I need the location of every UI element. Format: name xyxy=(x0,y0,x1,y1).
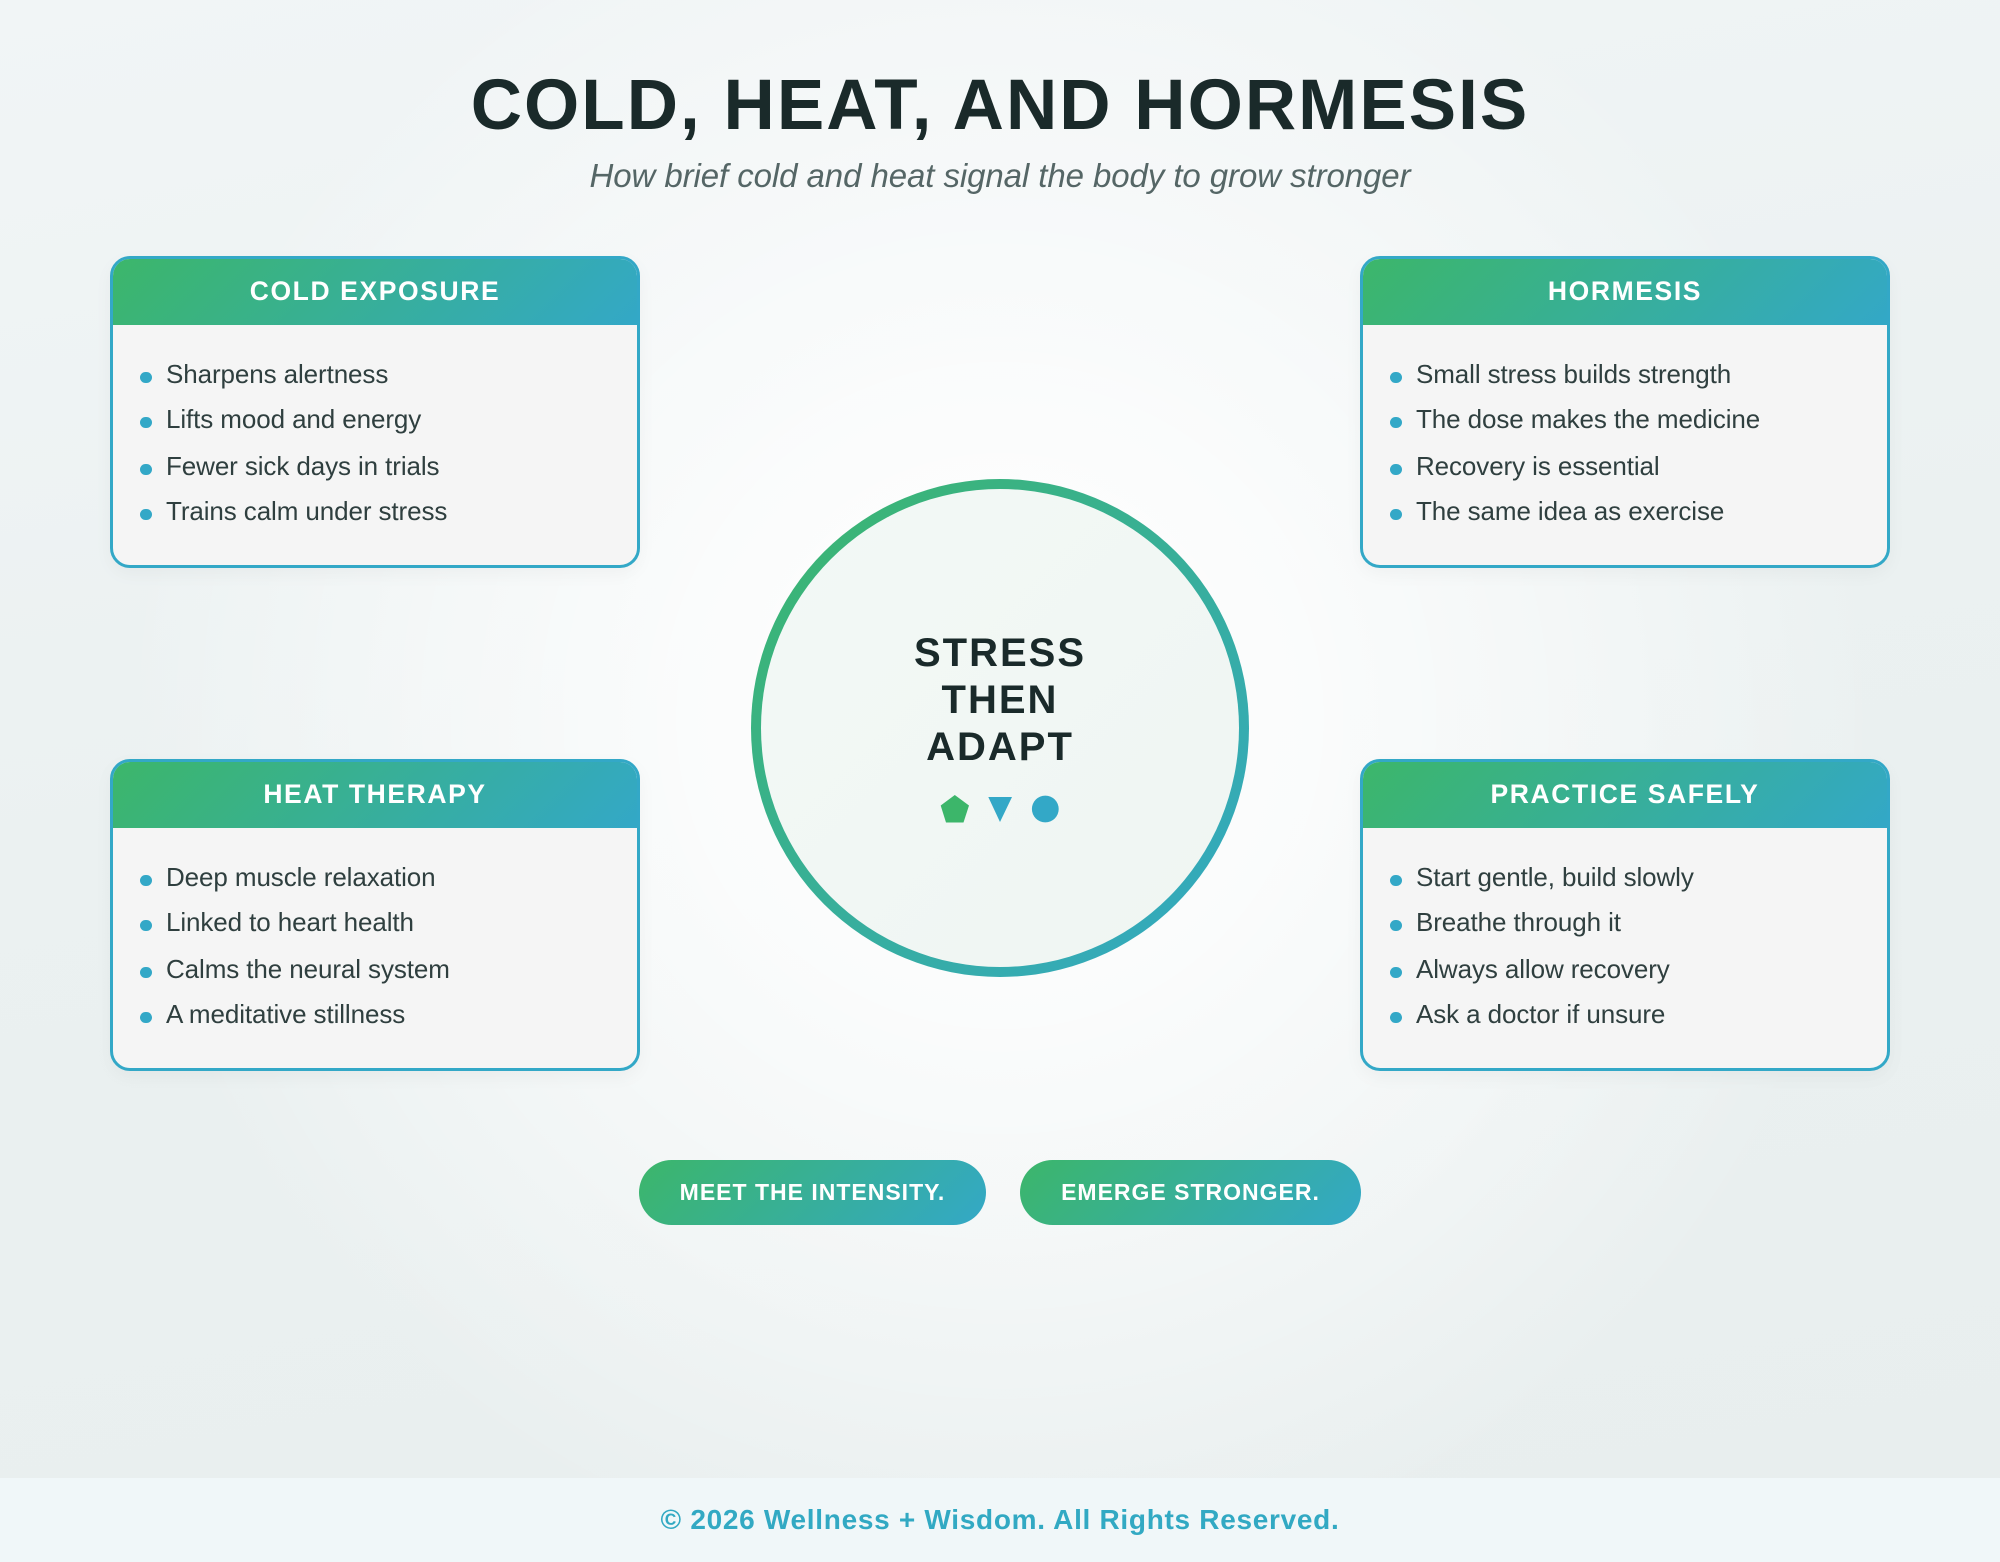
heading: heat therapy: HEAT THERAPY xyxy=(263,779,487,809)
icons: pentagon, triangle, circle xyxy=(940,795,1059,822)
panel: hormesis xyxy=(1360,256,1890,568)
list item: Recovery is essential xyxy=(1416,451,1660,481)
heading: hormesis: HORMESIS xyxy=(1548,276,1702,306)
panel: heat therapy xyxy=(110,759,640,1071)
central circle xyxy=(751,479,1249,977)
central text: ADAPT xyxy=(926,725,1074,769)
list item: A meditative stillness xyxy=(166,999,405,1029)
list item: Lifts mood and energy xyxy=(166,404,421,434)
list item: The same idea as exercise xyxy=(1416,496,1724,526)
heading: practice safely: PRACTICE SAFELY xyxy=(1491,779,1759,809)
subtitle: How brief cold and heat signal the body to grow stronger xyxy=(589,157,1410,194)
heading: practice safely xyxy=(1363,762,1887,828)
pill: meet the intensity: MEET THE INTENSITY. xyxy=(680,1179,945,1205)
footer xyxy=(0,1478,2000,1562)
list item: The dose makes the medicine xyxy=(1416,404,1760,434)
list item: Sharpens alertness xyxy=(166,359,388,389)
central text: THEN xyxy=(942,678,1058,722)
panel: cold exposure xyxy=(110,256,640,568)
heading: heat therapy xyxy=(113,762,637,828)
list item: Breathe through it xyxy=(1416,907,1621,937)
list item: Deep muscle relaxation xyxy=(166,862,436,892)
pill: emerge stronger xyxy=(1020,1160,1361,1225)
heading: hormesis xyxy=(1363,259,1887,325)
list item: Start gentle, build slowly xyxy=(1416,862,1694,892)
list item: Linked to heart health xyxy=(166,907,414,937)
list item: Small stress builds strength xyxy=(1416,359,1731,389)
title: COLD, HEAT, AND HORMESIS xyxy=(471,66,1529,145)
list item: Trains calm under stress xyxy=(166,496,447,526)
pill: emerge stronger: EMERGE STRONGER. xyxy=(1061,1179,1320,1205)
panel: practice safely xyxy=(1360,759,1890,1071)
list item: Fewer sick days in trials xyxy=(166,451,439,481)
list item: Always allow recovery xyxy=(1416,954,1670,984)
central text: STRESS xyxy=(914,631,1086,675)
list item: Calms the neural system xyxy=(166,954,450,984)
pill: meet the intensity xyxy=(639,1160,986,1225)
central text xyxy=(914,631,1086,769)
heading: cold exposure xyxy=(113,259,637,325)
heading: cold exposure: COLD EXPOSURE xyxy=(250,276,500,306)
footer: © 2026 Wellness + Wisdom. All Rights Reserved. xyxy=(661,1504,1339,1535)
list item: Ask a doctor if unsure xyxy=(1416,999,1665,1029)
